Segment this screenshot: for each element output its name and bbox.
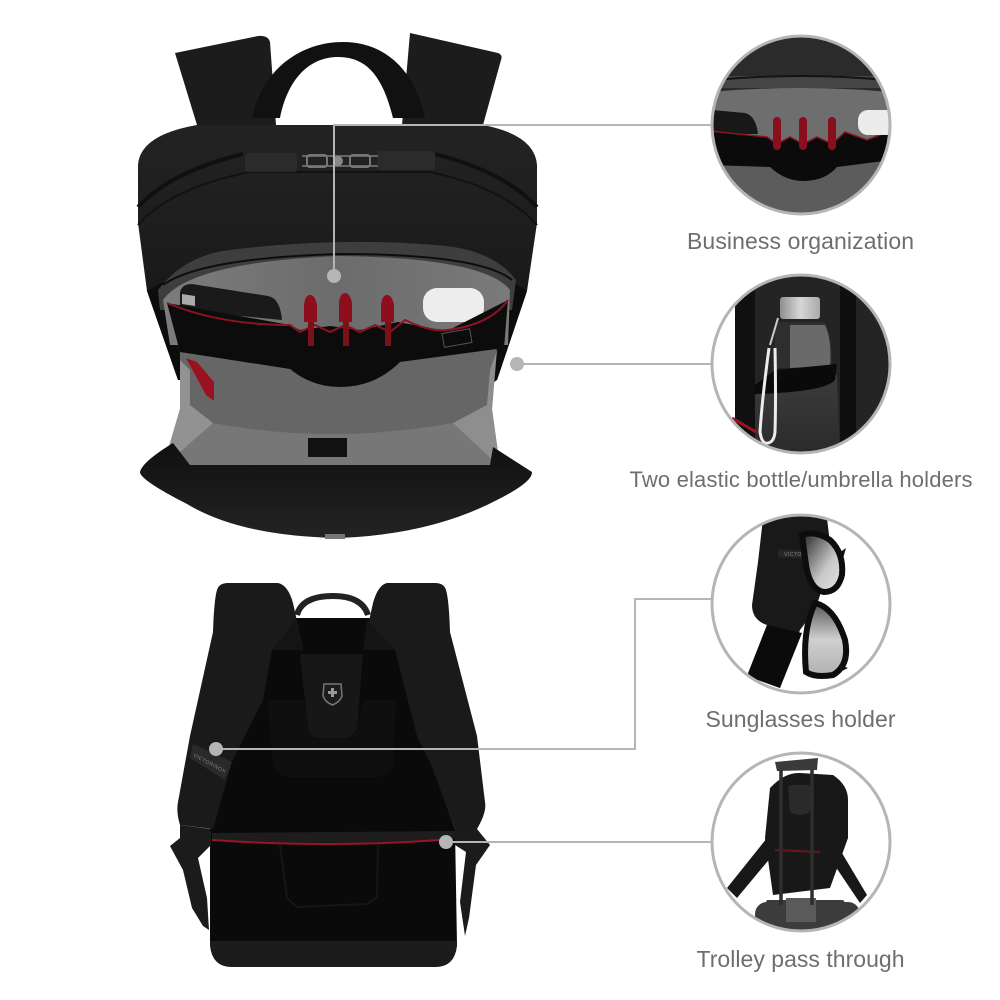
strap brand patch: VICTORINOX (192, 753, 227, 775)
front flap (140, 443, 532, 538)
bottom base (210, 941, 457, 967)
red stripe (212, 840, 440, 844)
earbuds case (423, 288, 484, 322)
brand patch (778, 550, 802, 558)
lining side wedges (163, 360, 213, 467)
pocket top band (212, 831, 457, 843)
left webbing and buckle (170, 825, 211, 930)
label: business organization: Business organization (687, 228, 914, 254)
right webbing and buckle (455, 829, 490, 936)
label: sunglasses holder: Sunglasses holder (706, 706, 896, 732)
strap brand patch (190, 744, 232, 780)
rear handle (297, 596, 368, 615)
strap connectors (272, 620, 395, 650)
band badge (442, 329, 472, 347)
bottom zip pull (325, 534, 345, 539)
right shoulder strap (402, 33, 502, 125)
open backpack front view (138, 33, 537, 539)
callout line: sunglasses holder (209, 599, 712, 756)
right strap (363, 583, 485, 829)
circle outline 2 (712, 275, 890, 453)
pocket lining (163, 256, 510, 345)
left shoulder strap (175, 36, 276, 125)
lower pocket shape (280, 845, 378, 907)
organizer band (167, 300, 508, 387)
circle outline 4 (712, 753, 890, 931)
label: bottle holders: Two elastic bottle/umbrella holders (630, 467, 972, 492)
victorinox shield logo (323, 684, 342, 705)
circle outline 1 (712, 36, 890, 214)
circle outline 3 (712, 515, 890, 693)
top handle (252, 42, 425, 118)
detail circle: bottle holder (732, 276, 888, 452)
lining floor (163, 423, 500, 467)
callout line: bottle holders (510, 357, 712, 371)
detail circle: trolley pass through (727, 758, 867, 930)
detail circle: sunglasses holder: VICTOR (784, 552, 806, 558)
pen caps (304, 293, 394, 322)
callout line: trolley pass through (439, 835, 712, 849)
pen clips (308, 322, 391, 346)
red piping (167, 300, 508, 332)
rear backpack view (170, 583, 490, 967)
label tag (308, 438, 347, 457)
shoulder padding panel (267, 700, 396, 777)
logo plate (300, 654, 363, 738)
callout line: business organization (327, 125, 712, 283)
label: trolley pass through: Trolley pass through (696, 946, 904, 972)
body shell (138, 125, 537, 380)
dark side shading (147, 282, 527, 385)
lower lining back wall (163, 345, 500, 467)
zipper pulls (245, 151, 435, 172)
pocket rim (158, 242, 516, 310)
phone (180, 284, 282, 320)
detail circle: sunglasses holder (748, 516, 850, 688)
detail circle: business organization (710, 34, 896, 216)
red tag (186, 358, 214, 401)
rear body panel (210, 618, 457, 967)
left strap (177, 583, 303, 829)
zip arcs (138, 154, 537, 207)
